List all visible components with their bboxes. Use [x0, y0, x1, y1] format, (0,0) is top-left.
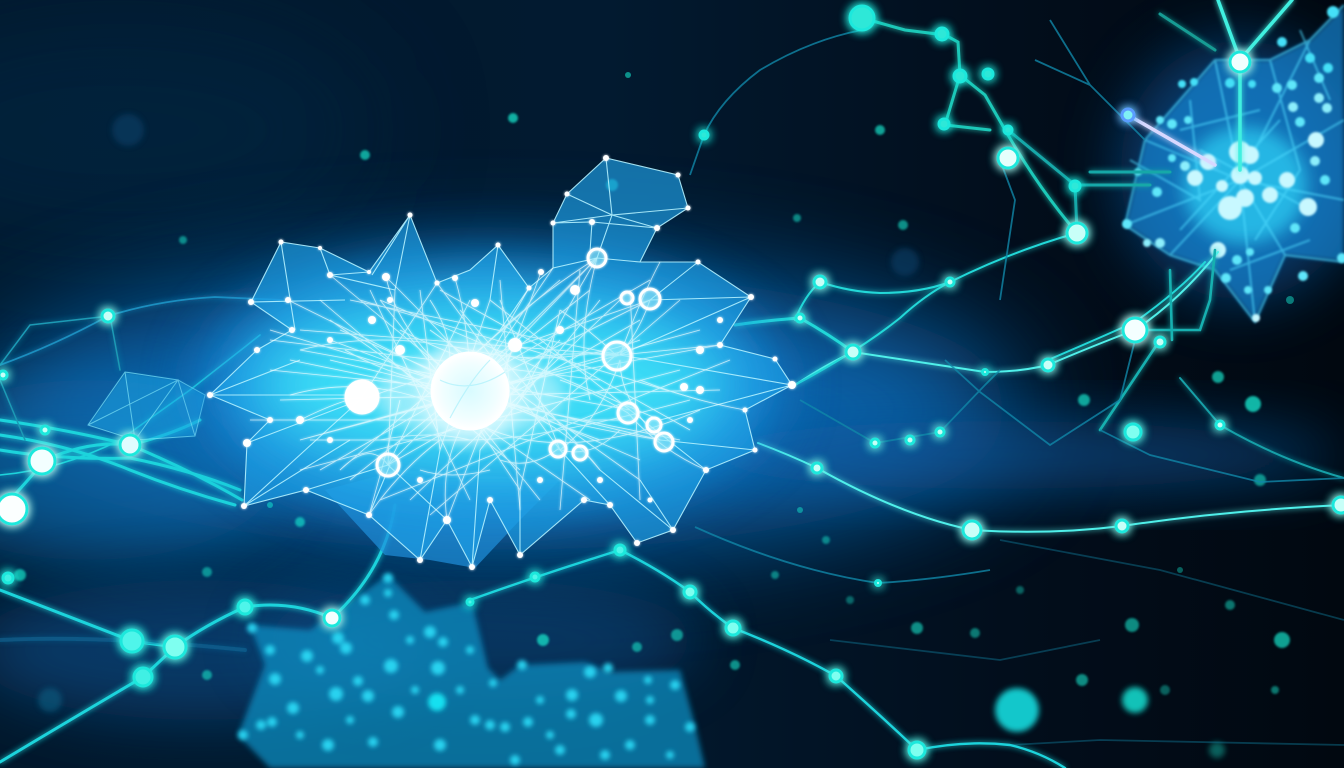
back facets — [325, 470, 560, 568]
cluster inner light — [255, 300, 725, 470]
central bright haze — [375, 350, 565, 440]
mesh wires — [210, 158, 792, 567]
cluster dots — [1122, 6, 1344, 322]
teal connection lines, left and bottom — [0, 297, 1065, 768]
teal connection lines, right side — [735, 0, 1344, 532]
cluster facets — [210, 158, 792, 567]
cluster core glow — [1183, 127, 1307, 243]
blurred bottom mesh cluster — [238, 573, 705, 768]
central mesh cluster — [200, 155, 796, 570]
cluster dots — [238, 573, 695, 765]
dim network lines — [690, 20, 1344, 745]
upper right mesh cluster — [1122, 5, 1344, 322]
cluster body — [238, 575, 705, 768]
left small mesh — [88, 372, 205, 440]
ring nodes — [346, 249, 673, 476]
cluster glow — [200, 255, 780, 515]
central core node — [418, 339, 522, 443]
dense inner mesh — [250, 258, 745, 520]
facet wires — [1125, 5, 1344, 322]
mesh vertices — [207, 155, 796, 570]
facets — [1125, 5, 1344, 322]
